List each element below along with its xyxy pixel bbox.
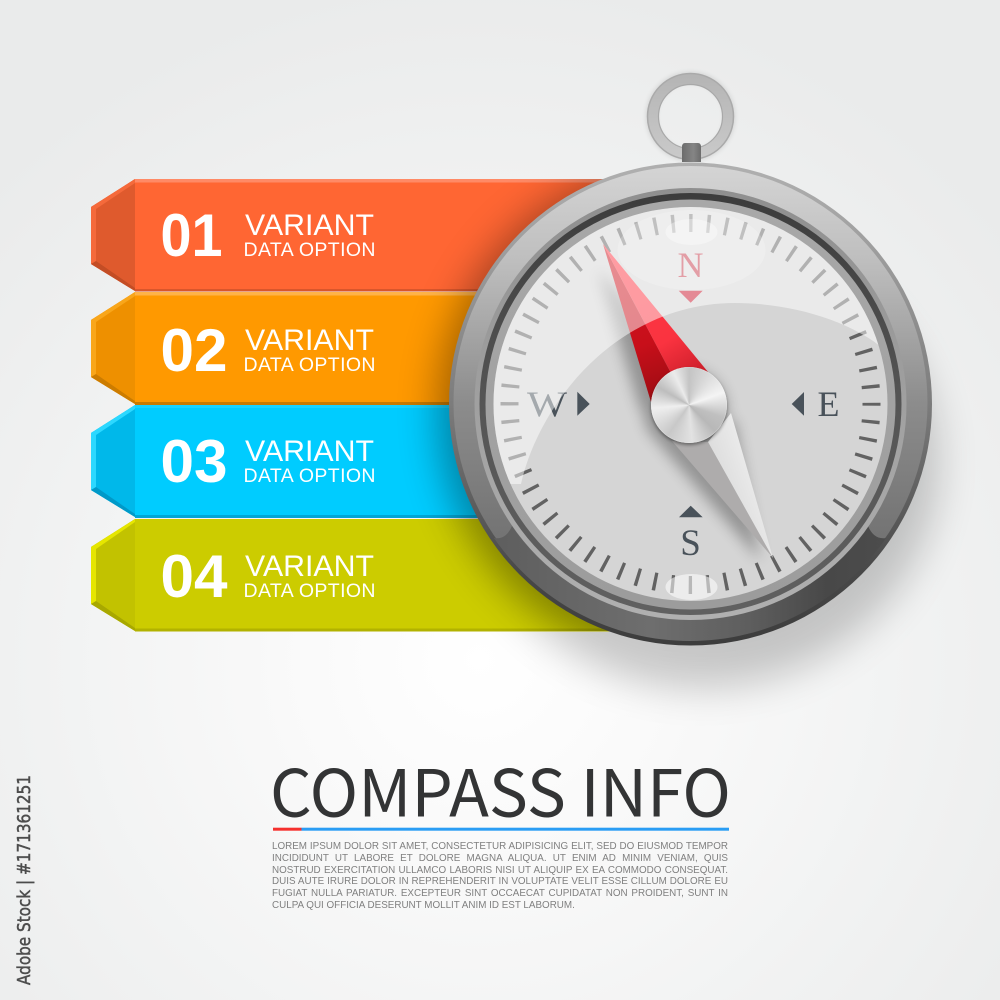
cardinal marks: S bbox=[680, 523, 701, 564]
panel: banner 04 bbox=[91, 519, 620, 632]
compass tick marks bbox=[510, 223, 872, 585]
panel: banner 02: 02 bbox=[160, 317, 228, 384]
text block: lorem ipsum: CULPA QUI OFFICIA DESERUNT MOLLIT ANIM ID EST LABORUM. bbox=[272, 900, 575, 911]
cardinal marks bbox=[527, 245, 840, 564]
cardinal marks: N bbox=[678, 245, 704, 285]
panel: banner 04: DATA OPTION bbox=[244, 580, 376, 602]
title underline bbox=[273, 828, 729, 831]
needle shadow bbox=[598, 270, 760, 560]
icon: compass center hub bbox=[650, 366, 726, 442]
panel: banner 01: DATA OPTION bbox=[244, 239, 376, 261]
text block: lorem ipsum: INCIDIDUNT UT LABORE ET DOLORE MAGNA ALIQUA. UT ENIM AD MINIM VENIAM, QUIS bbox=[272, 853, 728, 864]
compass bezel bbox=[449, 162, 932, 646]
text block: lorem ipsum bbox=[272, 841, 728, 911]
icon: watermark side label: Adobe Stock | #171361251 bbox=[14, 775, 35, 985]
text block: lorem ipsum: FUGIAT NULLA PARIATUR. EXCEPTEUR SINT OCCAECAT CUPIDATAT NON PROIDENT, SUNT IN bbox=[272, 888, 728, 899]
compass ring bbox=[648, 74, 734, 162]
panel: banner 03: 03 bbox=[160, 428, 228, 495]
panel: banner 04: VARIANT bbox=[245, 550, 374, 583]
panel: banner 01 bbox=[91, 179, 620, 292]
panel: banner 04: 04 bbox=[160, 543, 228, 610]
text block: lorem ipsum: LOREM IPSUM DOLOR SIT AMET, CONSECTETUR ADIPISICING ELIT, SED DO EIUSMOD TEMPOR bbox=[272, 841, 728, 852]
cardinal marks: E bbox=[818, 384, 840, 424]
panel: banner 03: VARIANT bbox=[245, 435, 374, 468]
panel: banner 02: DATA OPTION bbox=[244, 354, 376, 376]
panel: banner 02: VARIANT bbox=[245, 324, 374, 357]
panel: banner 03: DATA OPTION bbox=[244, 465, 376, 487]
compass shadow on banners bbox=[414, 179, 608, 631]
icon: compass bbox=[449, 74, 932, 646]
panel: banner 03 bbox=[91, 405, 620, 518]
panel: banner list bbox=[91, 179, 620, 632]
panel: banner 01: VARIANT bbox=[245, 209, 374, 242]
text block: lorem ipsum: DUIS AUTE IRURE DOLOR IN REPREHENDERIT IN VOLUPTATE VELIT ESSE CILLUM DOLORE EU bbox=[272, 876, 728, 887]
panel: banner 02 bbox=[91, 292, 620, 405]
text block: lorem ipsum: NOSTRUD EXERCITATION ULLAMCO LABORIS NISI UT ALIQUIP EX EA COMMODO CONSEQUAT. bbox=[272, 865, 728, 876]
cardinal marks: W bbox=[527, 384, 567, 424]
panel: banner 01: 01 bbox=[160, 202, 222, 269]
compass cast shadow on background bbox=[462, 236, 938, 688]
compass face bbox=[494, 207, 888, 601]
lens gloss bbox=[494, 207, 878, 600]
compass needle bbox=[603, 244, 773, 558]
title: COMPASS INFO bbox=[270, 742, 731, 836]
